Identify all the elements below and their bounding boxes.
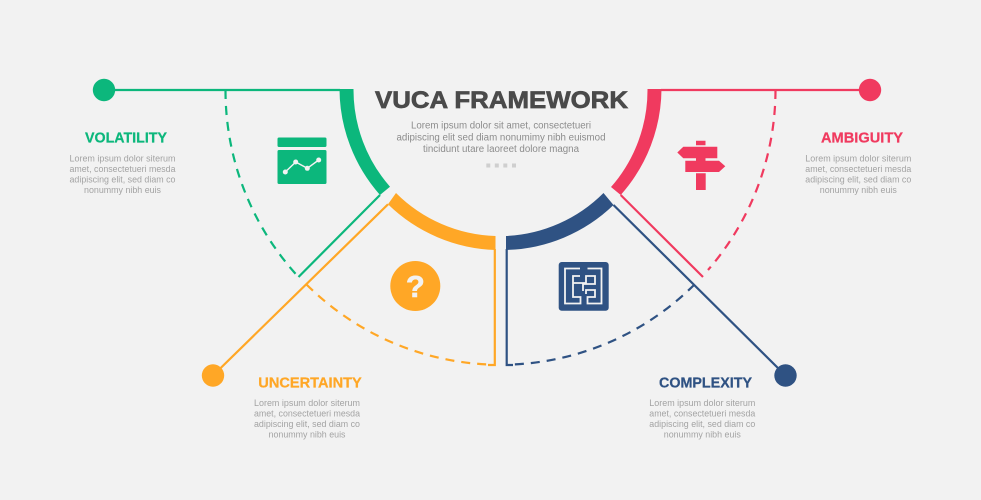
text block: complexity: Lorem ipsum dolor siterum — [649, 398, 755, 408]
text block: uncertainty: nonummy nibh euis — [268, 430, 346, 440]
dashed arc: ambiguity — [708, 90, 776, 270]
text block: ambiguity: amet, consectetueri mesda — [805, 164, 911, 174]
icon: chart window — [278, 138, 326, 184]
text block: volatility: amet, consectetueri mesda — [70, 164, 176, 174]
heading: ambiguity: AMBIGUITY — [821, 130, 903, 146]
dot: complexity — [774, 364, 797, 387]
thick arc: ambiguity — [611, 89, 662, 195]
dashed arc: volatility — [225, 90, 298, 277]
connector line: volatility — [104, 90, 380, 277]
text block: uncertainty: amet, consectetueri mesda — [254, 408, 360, 418]
text block: uncertainty — [254, 398, 360, 440]
dot: ambiguity — [859, 79, 881, 101]
heading: uncertainty: UNCERTAINTY — [258, 376, 362, 392]
text block: intro — [396, 120, 606, 155]
panel: uncertainty — [202, 193, 496, 440]
icon: maze — [559, 262, 609, 311]
heading: volatility: VOLATILITY — [85, 130, 167, 146]
text block: complexity: amet, consectetueri mesda — [649, 408, 755, 418]
text block: complexity: nonummy nibh euis — [664, 430, 741, 440]
panel: complexity — [506, 193, 797, 440]
panel: ambiguity — [611, 79, 911, 277]
text block: complexity — [649, 398, 755, 440]
text block: volatility: nonummy nibh euis — [84, 185, 162, 195]
text block: complexity: adipiscing elit, sed diam co — [649, 419, 755, 429]
text block: ambiguity: adipiscing elit, sed diam co — [805, 174, 911, 184]
text block: uncertainty: Lorem ipsum dolor siterum — [254, 398, 360, 408]
text block: volatility: adipiscing elit, sed diam co — [70, 174, 176, 184]
text block: ambiguity: nonummy nibh euis — [820, 185, 897, 195]
thick arc: volatility — [340, 89, 390, 195]
thick arc: uncertainty — [388, 193, 496, 250]
thick arc: complexity — [506, 193, 614, 250]
icon: signpost — [677, 141, 725, 190]
panel: volatility — [70, 79, 390, 277]
pagination dots — [486, 164, 516, 168]
icon: question mark — [390, 261, 440, 311]
text block: volatility — [70, 154, 176, 195]
text block: intro: adipiscing elit sed diam nonumimy nibh euismod — [396, 132, 606, 143]
title: VUCA FRAMEWORK — [375, 87, 628, 114]
connector line: complexity — [507, 205, 786, 376]
dashed arc: complexity — [513, 284, 694, 364]
connector line: ambiguity — [621, 90, 870, 277]
text block: ambiguity: Lorem ipsum dolor siterum — [805, 154, 911, 164]
icon: question mark: ? — [406, 269, 425, 304]
text block: intro: Lorem ipsum dolor sit amet, consectetueri — [411, 120, 591, 132]
connector line: uncertainty — [213, 204, 495, 376]
dot: uncertainty — [202, 364, 224, 387]
dot: volatility — [93, 79, 115, 101]
text block: volatility: Lorem ipsum dolor siterum — [70, 154, 176, 164]
text block: intro: tincidunt utare laoreet dolore magna — [423, 144, 580, 155]
heading: complexity: COMPLEXITY — [659, 376, 752, 392]
text block: ambiguity — [805, 154, 911, 195]
text block: uncertainty: adipiscing elit, sed diam co — [254, 419, 360, 429]
dashed arc: uncertainty — [306, 284, 488, 364]
